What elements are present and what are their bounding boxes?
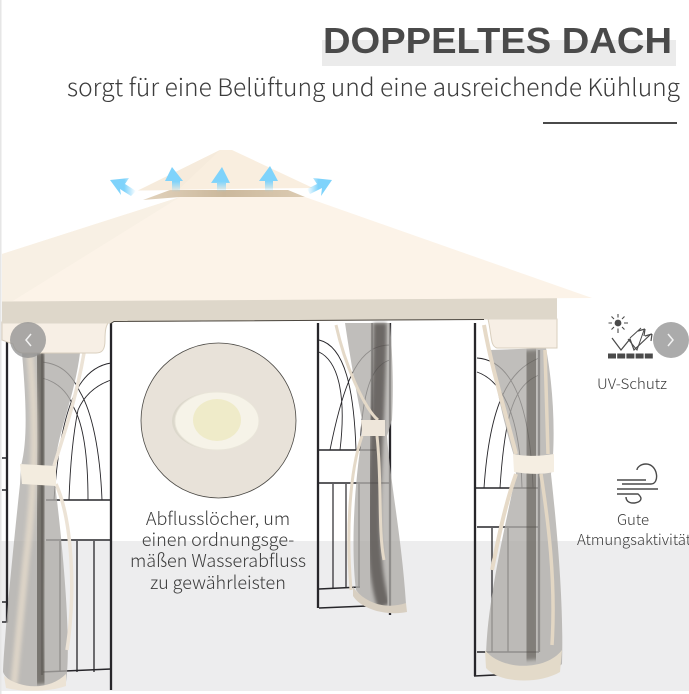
- icon: UV protection: [608, 314, 653, 356]
- carousel button: next: [653, 322, 689, 358]
- title rule: [543, 122, 677, 124]
- airflow arrow 2: [165, 167, 183, 192]
- gazebo: [2, 150, 592, 691]
- floor band: [2, 541, 689, 691]
- airflow arrow 1: [110, 178, 136, 196]
- breathability label: [577, 509, 689, 550]
- airflow arrow 3: [211, 167, 230, 192]
- upper roof: [138, 150, 313, 190]
- roof flap right: [488, 319, 557, 348]
- roof valance: [2, 298, 557, 324]
- drain hole caption: zu gewährleisten: [150, 569, 286, 595]
- lower roof left facet: [2, 197, 180, 302]
- subtitle: sorgt für eine Belüftung und eine ausreichende Kühlung: [67, 68, 680, 103]
- breathability label: Gute: [617, 509, 649, 530]
- drain hole detail: [141, 343, 296, 498]
- drain hole caption: einen ordnungsge-: [142, 526, 294, 552]
- drain hole caption: mäßen Wasserabfluss: [130, 547, 306, 573]
- icon: wind: [617, 464, 658, 503]
- lower roof: [2, 197, 592, 302]
- breathability label: Atmungsaktivität: [577, 529, 689, 550]
- roof flap left: [2, 322, 109, 353]
- left corner frame and curtain: [2, 323, 111, 691]
- UV label: UV-Schutz: [597, 373, 667, 394]
- drain hole caption: [130, 505, 306, 595]
- airflow arrow 4: [259, 166, 278, 192]
- airflow arrow 5: [307, 178, 332, 196]
- upper roof left facet: [138, 150, 220, 190]
- drain hole caption: Abflusslöcher, um: [146, 505, 290, 531]
- carousel button: previous: [10, 322, 46, 358]
- right corner frame and curtain: [474, 323, 562, 681]
- page background edge: [0, 0, 2, 694]
- title: DOPPELTES DACH: [323, 20, 672, 61]
- upper roof vent shadow: [143, 190, 305, 200]
- centre frame and curtain: [318, 323, 407, 615]
- valance trim line: [110, 320, 484, 324]
